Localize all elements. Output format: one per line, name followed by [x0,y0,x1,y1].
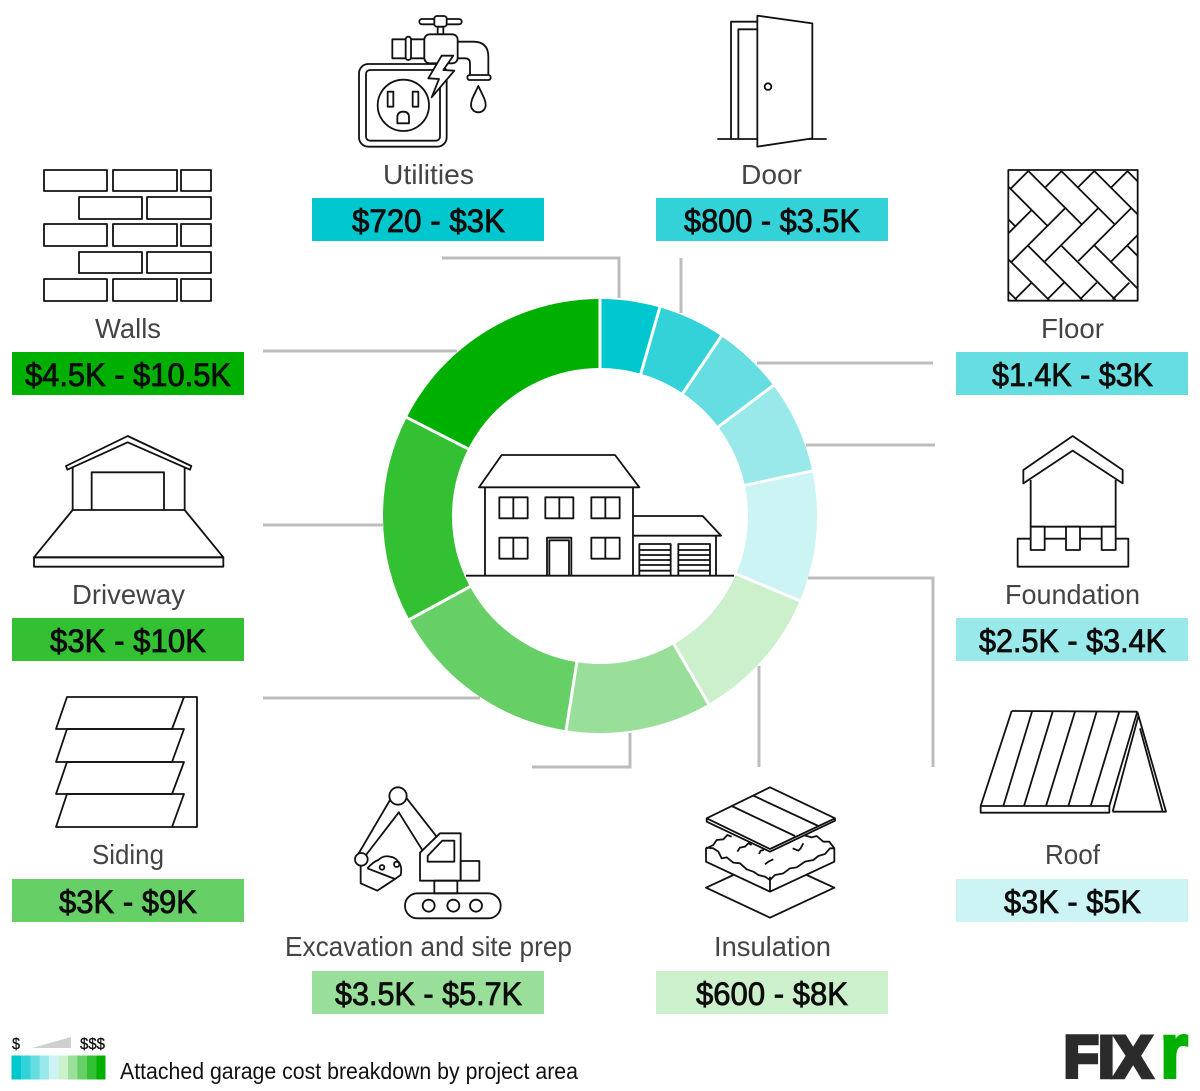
donut chart [404,296,815,733]
panel: roof [956,711,1188,922]
legend: $$$ [80,1036,105,1053]
legend: $ [12,1036,20,1053]
value: walls cost: $4.5K - $10.5K [25,357,231,393]
value: floor cost: $1.4K - $3K [992,357,1153,393]
panel: driveway [12,436,244,661]
label: Utilities [383,159,474,190]
label: Walls [95,313,161,344]
icon: roof [981,711,1166,813]
icon: house [466,455,734,576]
label: Insulation [714,931,831,962]
panel: siding [12,697,244,922]
legend [12,1036,578,1084]
panel: foundation [956,436,1188,661]
logo: FIX [1064,1025,1152,1090]
panel: excavation and site prep [285,787,572,1014]
icon: insulation layers [706,787,835,918]
icon: garage with driveway [34,436,223,567]
label: Floor [1041,313,1104,344]
value: door cost: $800 - $3.5K [684,203,860,239]
label: Foundation [1005,579,1140,610]
icon: house on foundation [1018,436,1128,567]
icon: door [717,16,827,147]
label: Driveway [72,579,185,610]
label: Door [741,159,802,190]
icon: herringbone floor [1008,170,1138,301]
value: driveway cost [12,618,244,661]
value: siding cost [12,879,244,922]
icon: excavator [355,787,501,918]
panel: floor [956,170,1188,395]
label: Siding [92,839,164,870]
panel: insulation [656,787,888,1014]
value: roof cost [956,879,1188,922]
icon: siding panels [56,697,197,827]
value: floor cost [956,352,1188,395]
panel: door [656,16,888,241]
value: foundation cost: $2.5K - $3.4K [979,623,1166,659]
value: insulation cost: $600 - $8K [696,976,848,1012]
value: driveway cost: $3K - $10K [50,623,206,659]
value: utilities cost [312,198,544,241]
label: Excavation and site prep [285,931,572,962]
icon: brick wall [44,170,211,301]
panel: utilities [312,16,544,241]
value: roof cost: $3K - $5K [1004,884,1141,920]
logo [1064,1006,1188,1091]
value: insulation cost [656,971,888,1014]
icon: outlet and faucet [359,16,491,147]
value: siding cost: $3K - $9K [59,884,197,920]
panel: walls [12,170,244,395]
value: door cost [656,198,888,241]
label: Roof [1045,839,1100,870]
legend: Attached garage cost breakdown by project area [120,1058,578,1084]
value: utilities cost: $720 - $3K [352,203,505,239]
value: excavation cost: $3.5K - $5.7K [335,976,522,1012]
leader lines [263,258,935,767]
